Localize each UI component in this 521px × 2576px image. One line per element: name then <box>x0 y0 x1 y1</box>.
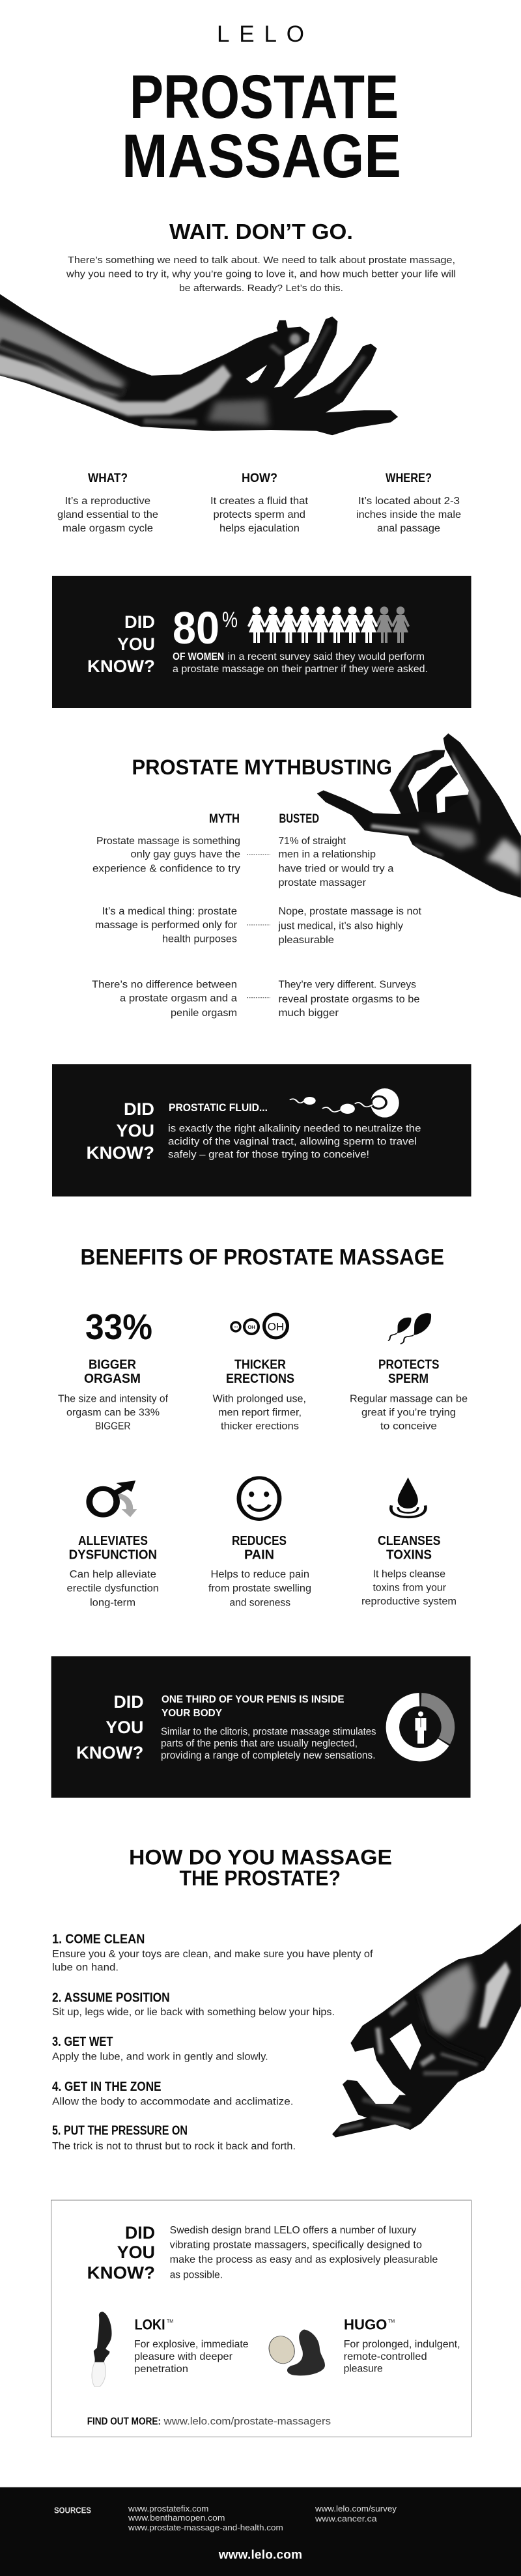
text block: women survey: a prostate massage on their partner if they were asked. <box>173 664 428 675</box>
footer <box>0 2487 521 2576</box>
link: find out more: FIND OUT MORE: <box>87 2416 161 2427</box>
benefit: protects sperm: to conceive <box>380 1421 437 1432</box>
step 4: 4. GET IN THE ZONE <box>52 2080 162 2094</box>
heading: did you know <box>86 1099 154 1163</box>
heading: did you know: YOU <box>116 1121 154 1140</box>
subheading: one third <box>162 1694 345 1719</box>
heading: did you know: YOU <box>117 634 155 654</box>
benefit: reduces pain <box>208 1478 311 1609</box>
step 5: The trick is not to thrust but to rock it back and forth. <box>52 2141 296 2152</box>
benefit: bigger orgasm: BIGGER <box>95 1421 130 1432</box>
text block: women survey <box>173 651 428 675</box>
myth row 2: pleasurable <box>279 935 334 946</box>
step 1: 1. COME CLEAN <box>52 1932 145 1946</box>
sources list <box>128 2504 397 2532</box>
myth row 3: They’re very different. Surveys <box>279 980 416 991</box>
product: Hugo: HUGO <box>344 2316 387 2333</box>
icon: sperm swimming to egg <box>290 1088 399 1118</box>
myth row 3: There’s no difference between <box>92 980 237 991</box>
benefit: cleanses toxins <box>361 1477 457 1607</box>
text block: women survey: in a recent survey said they would perform <box>228 651 425 662</box>
text block: Swedish design brand: Swedish design brand LELO offers a number of luxury <box>170 2225 417 2236</box>
heading: prostate mythbusting: PROSTATE MYTHBUSTING <box>132 756 392 779</box>
subheading: one third: ONE THIRD OF YOUR PENIS IS INSIDE <box>162 1694 345 1705</box>
product: Loki: TM <box>167 2319 173 2324</box>
step 1: lube on hand. <box>52 1962 119 1974</box>
column heading: myth: MYTH <box>209 812 240 826</box>
sources list: www.prostate-massage-and-health.com <box>128 2523 283 2532</box>
panel: did you know one third <box>51 1656 471 1798</box>
benefit: bigger orgasm: BIGGER <box>89 1358 137 1372</box>
heading: did you know: DID <box>124 1099 154 1119</box>
heading: how do you massage the prostate: THE PROSTATE? <box>180 1866 341 1890</box>
step 5 <box>52 2124 296 2152</box>
heading: did you know <box>76 1692 143 1762</box>
myth row 1: Prostate massage is something <box>96 836 240 847</box>
myth row 2: It’s a medical thing: prostate <box>102 906 237 917</box>
text block: alkalinity: is exactly the right alkalinity needed to neutralize the <box>168 1124 421 1135</box>
product: Loki <box>134 2316 249 2375</box>
heading: how do you massage the prostate <box>129 1846 392 1890</box>
subheading: one third: YOUR BODY <box>162 1708 223 1719</box>
myth row 1: experience & confidence to try <box>92 864 240 875</box>
benefit: thicker erections: With prolonged use, <box>212 1394 306 1405</box>
icon: male symbol with arrows <box>89 1480 137 1517</box>
myth row 2: health purposes <box>162 934 237 945</box>
icon: smiley face <box>239 1478 279 1519</box>
text block: Swedish design brand <box>170 2225 438 2280</box>
step 1 <box>52 1932 373 1974</box>
text block: alkalinity <box>168 1124 421 1161</box>
benefit: reduces pain: PAIN <box>244 1548 274 1563</box>
myth row 2: Nope, prostate massage is not <box>279 906 422 917</box>
website: www.lelo.com <box>218 2549 302 2562</box>
title <box>122 63 401 191</box>
benefit: reduces pain: from prostate swelling <box>208 1583 311 1594</box>
benefit: reduces pain: and soreness <box>229 1598 290 1609</box>
heading: did you know: YOU <box>117 2243 155 2262</box>
step 3 <box>52 2035 268 2063</box>
benefit: cleanses toxins: reproductive system <box>361 1596 457 1607</box>
column: how <box>210 471 309 534</box>
sources list: www.benthamopen.com <box>128 2513 225 2523</box>
product: Loki: pleasure with deeper <box>134 2351 232 2362</box>
benefit: protects sperm: Regular massage can be <box>350 1394 468 1405</box>
heading: did you know: KNOW? <box>76 1743 143 1762</box>
benefit: thicker erections <box>212 1314 306 1432</box>
step 1: Ensure you & your toys are clean, and make sure you have plenty of <box>52 1949 373 1960</box>
benefit: thicker erections: THICKER <box>234 1358 286 1372</box>
heading: did you know: DID <box>124 612 155 632</box>
column heading: busted: BUSTED <box>279 812 319 826</box>
myth row 1: men in a relationship <box>279 849 376 860</box>
heading: did you know: DID <box>125 2223 155 2243</box>
benefit: alleviates dysfunction: Can help alleviate <box>70 1569 156 1580</box>
product: Hugo: For prolonged, indulgent, <box>344 2339 460 2350</box>
logo: LELO: LELO <box>217 21 304 47</box>
myth row 1: only gay guys have the <box>130 849 240 860</box>
text block: alkalinity: acidity of the vaginal tract, allowing sperm to travel <box>168 1137 417 1148</box>
benefit: thicker erections: thicker erections <box>221 1421 299 1432</box>
benefit: bigger orgasm: ORGASM <box>84 1372 141 1386</box>
icon: growing OH circles <box>231 1314 288 1338</box>
sources label: SOURCES <box>54 2506 91 2515</box>
benefit: protects sperm: PROTECTS <box>378 1358 439 1372</box>
text block: alkalinity: safely – great for those trying to conceive! <box>168 1150 369 1161</box>
stat: 80 percent: 80 <box>173 602 219 653</box>
column: how: helps ejaculation <box>219 523 300 534</box>
heading: did you know: KNOW? <box>87 657 155 676</box>
subheading: prostatic fluid: PROSTATIC FLUID... <box>169 1102 268 1114</box>
step 4: Allow the body to accommodate and acclimatize. <box>52 2097 293 2108</box>
icon: row of ten women, eight white and two grey <box>247 606 410 643</box>
product: Hugo: pleasure <box>344 2363 383 2374</box>
icon: 33 percent: 33% <box>85 1307 152 1347</box>
text block: similar to the clitoris <box>161 1726 376 1761</box>
benefit: bigger orgasm: orgasm can be 33% <box>66 1408 160 1419</box>
benefit: reduces pain: REDUCES <box>232 1534 287 1548</box>
myth row 3: penile orgasm <box>171 1008 237 1019</box>
benefit: cleanses toxins: CLEANSES <box>378 1534 440 1548</box>
intro text block <box>66 255 456 294</box>
heading: benefits of prostate massage: BENEFITS OF PROSTATE MASSAGE <box>81 1245 444 1269</box>
intro text block: why you need to try it, why you’re going to love it, and how much better your life will <box>66 268 456 280</box>
heading: wait don't go: WAIT. DON’T GO. <box>169 219 353 244</box>
link: find out more: www.lelo.com/prostate-massagers <box>163 2416 331 2427</box>
product: Loki: penetration <box>134 2364 188 2375</box>
myth row 1: 71% of straight <box>279 836 346 847</box>
text block: Swedish design brand: make the process as easy and as explosively pleasurable <box>170 2254 438 2265</box>
benefit: protects sperm: SPERM <box>388 1372 429 1386</box>
image: Loki massager <box>92 2312 112 2386</box>
column: what <box>57 471 158 534</box>
column: how: HOW? <box>242 471 277 485</box>
myth row 2: massage is performed only for <box>95 920 237 931</box>
myth row 3 <box>92 980 419 1019</box>
column: where <box>356 471 461 534</box>
column: where: WHERE? <box>386 471 432 485</box>
stat: 80 percent: % <box>222 608 238 632</box>
text block: women survey: OF WOMEN <box>173 651 224 662</box>
chart: one third donut with man <box>393 1699 448 1755</box>
myth row 1: have tried or would try a <box>279 864 394 875</box>
heading: did you know: DID <box>113 1692 143 1712</box>
benefit: alleviates dysfunction: ALLEVIATES <box>78 1534 148 1548</box>
benefit: alleviates dysfunction <box>66 1480 159 1609</box>
icon: growing OH circles: OH <box>268 1321 284 1333</box>
benefit: bigger orgasm <box>58 1307 169 1432</box>
column: where: anal passage <box>377 523 440 534</box>
heading: did you know <box>87 612 155 676</box>
heading: did you know: KNOW? <box>87 2263 155 2282</box>
benefit: alleviates dysfunction: DYSFUNCTION <box>69 1548 157 1563</box>
image: Hugo massager and remote <box>267 2329 325 2375</box>
link: find out more <box>87 2416 331 2427</box>
text block: Swedish design brand: as possible. <box>170 2269 223 2280</box>
benefit: thicker erections: men report firmer, <box>218 1408 302 1419</box>
intro text block: be afterwards. Ready? Let’s do this. <box>179 283 343 294</box>
myth row 3: much bigger <box>279 1008 339 1019</box>
myth row 2 <box>95 906 422 946</box>
column: where: It’s located about 2-3 <box>358 496 460 507</box>
sources list: www.lelo.com/survey <box>315 2504 397 2513</box>
myth row 1 <box>92 836 394 888</box>
column: what: WHAT? <box>88 471 128 485</box>
step 3: Apply the lube, and work in gently and slowly. <box>52 2052 268 2063</box>
step 2: Sit up, legs wide, or lie back with something below your hips. <box>52 2007 335 2018</box>
sources list: www.cancer.ca <box>315 2515 377 2524</box>
myth row 3: reveal prostate orgasms to be <box>279 994 419 1005</box>
text block: similar to the clitoris: providing a range of completely new sensations. <box>161 1750 375 1761</box>
title: PROSTATE <box>130 63 399 132</box>
step 2 <box>52 1990 335 2018</box>
panel: did you know LELO products <box>51 2200 472 2437</box>
benefit: bigger orgasm: The size and intensity of <box>58 1394 169 1405</box>
column: what: male orgasm cycle <box>63 523 153 534</box>
column: how: It creates a fluid that <box>210 496 309 507</box>
text block: similar to the clitoris: parts of the penis that are usually neglected, <box>161 1738 358 1749</box>
text block: similar to the clitoris: Similar to the clitoris, prostate massage stimulates <box>161 1726 376 1737</box>
myth row 3: a prostate orgasm and a <box>120 993 237 1004</box>
step 5: 5. PUT THE PRESSURE ON <box>52 2124 188 2138</box>
benefit: alleviates dysfunction: long-term <box>90 1598 135 1609</box>
image: black painted arm and open hand <box>0 294 398 435</box>
intro text block: There’s something we need to talk about. We need to talk about prostate massage, <box>68 255 455 266</box>
step 3: 3. GET WET <box>52 2035 113 2049</box>
what how where columns <box>57 471 461 534</box>
benefit: protects sperm: great if you’re trying <box>361 1408 456 1419</box>
icon: water drop with ripples <box>391 1477 425 1517</box>
icon: growing OH circles: OH <box>247 1324 255 1330</box>
myth row 1: prostate massager <box>279 877 366 888</box>
myth row 2: just medical, it’s also highly <box>277 921 403 932</box>
step 2: 2. ASSUME POSITION <box>52 1990 170 2005</box>
benefit: alleviates dysfunction: erectile dysfunction <box>66 1583 159 1594</box>
image: black painted hand, pinching gesture <box>317 733 521 898</box>
product: Loki: For explosive, immediate <box>134 2339 249 2350</box>
title: MASSAGE <box>122 122 401 191</box>
icon: growing OH circles: OH <box>234 1325 238 1329</box>
product: Loki: LOKI <box>135 2316 165 2333</box>
heading: how do you massage the prostate: HOW DO YOU MASSAGE <box>129 1846 392 1869</box>
benefit: reduces pain: Helps to reduce pain <box>211 1569 309 1580</box>
heading: did you know: KNOW? <box>86 1143 154 1163</box>
column: what: gland essential to the <box>57 509 158 520</box>
heading: did you know <box>87 2223 155 2282</box>
heading: did you know: YOU <box>106 1718 143 1737</box>
column: what: It’s a reproductive <box>65 496 150 507</box>
icon: two sperm <box>388 1313 431 1344</box>
product: Hugo: remote-controlled <box>344 2351 427 2362</box>
image: black painted hand, downward gesture <box>332 1924 521 2138</box>
benefit: cleanses toxins: It helps cleanse <box>373 1569 445 1580</box>
benefit: cleanses toxins: toxins from your <box>373 1583 446 1594</box>
product: Hugo: TM <box>388 2319 395 2324</box>
benefit: cleanses toxins: TOXINS <box>386 1548 432 1563</box>
panel: did you know prostatic fluid <box>52 1064 472 1196</box>
text block: Swedish design brand: vibrating prostate massagers, specifically designed to <box>170 2239 422 2251</box>
panel: did you know 80 percent <box>52 576 472 708</box>
product: Hugo <box>344 2316 460 2374</box>
step 4 <box>52 2080 293 2108</box>
column: where: inches inside the male <box>356 509 461 520</box>
benefit: protects sperm <box>350 1313 468 1432</box>
sources list: www.prostatefix.com <box>128 2504 208 2513</box>
column: how: protects sperm and <box>214 509 305 520</box>
benefit: thicker erections: ERECTIONS <box>226 1372 294 1386</box>
